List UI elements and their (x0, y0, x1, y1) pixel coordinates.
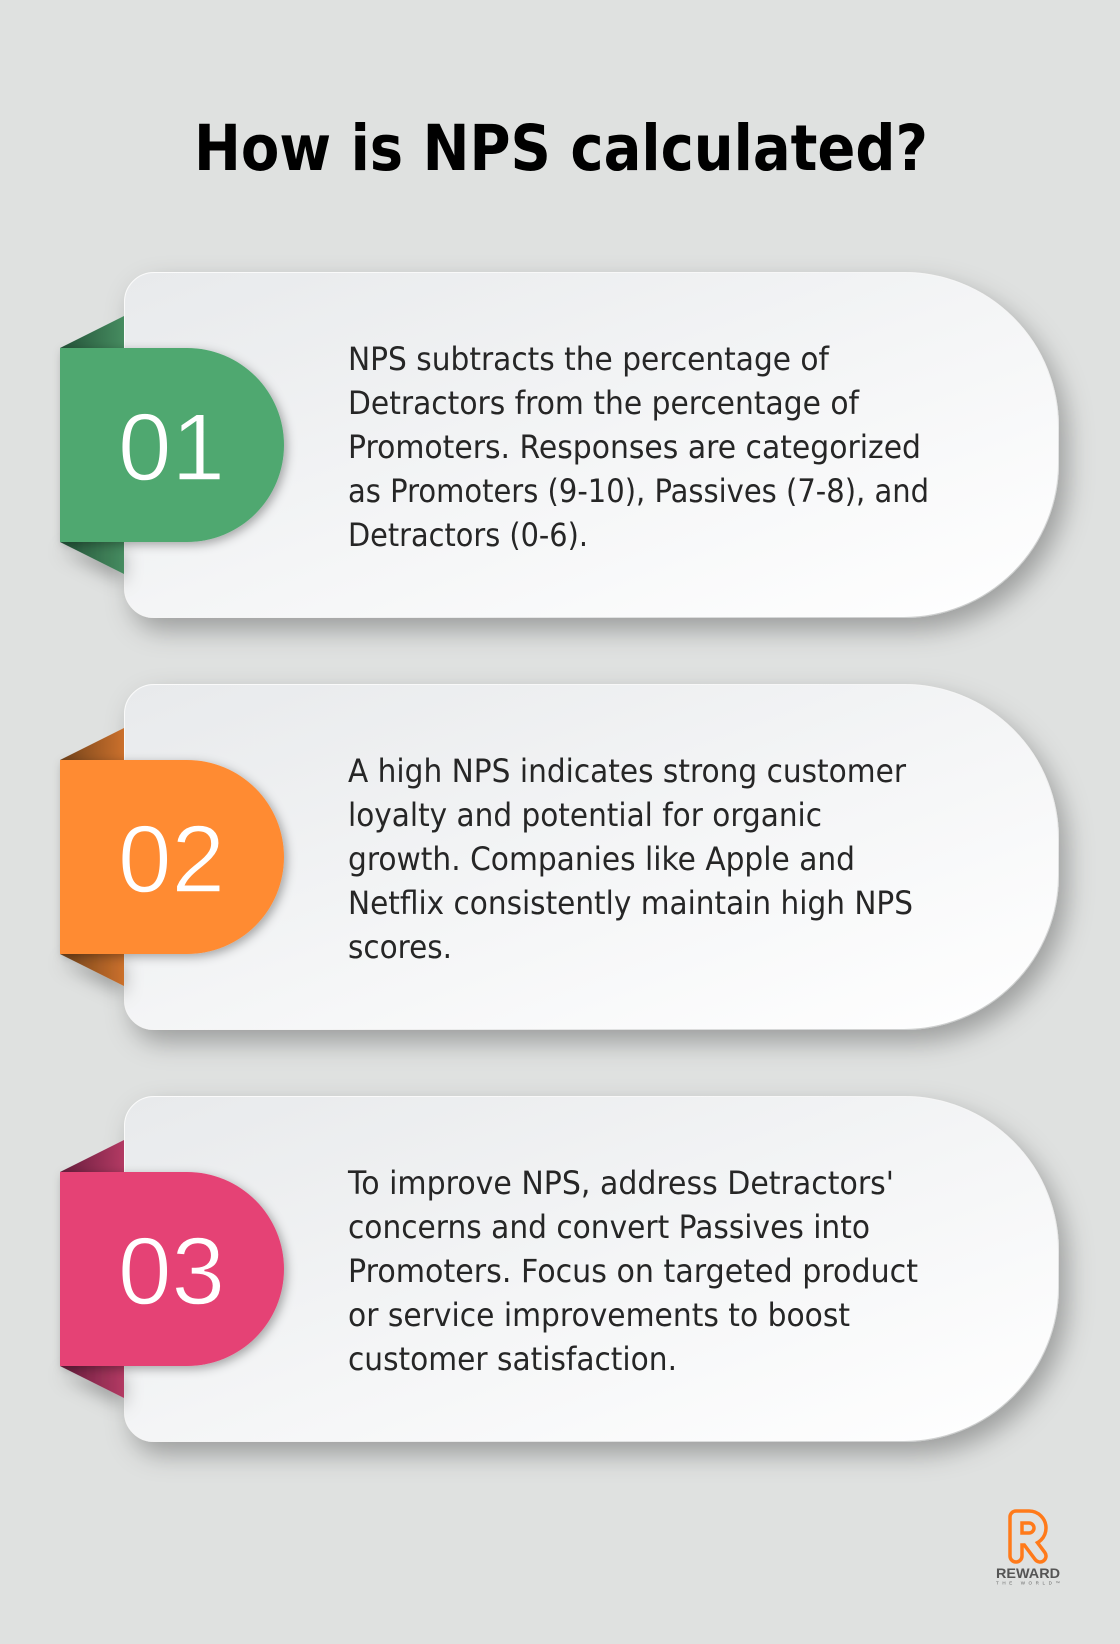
ribbon fold top 03 (60, 1140, 124, 1172)
text block 02: loyalty and potential for organic (348, 796, 822, 834)
text block 03: customer satisfaction. (348, 1340, 677, 1378)
text block 02 (348, 752, 913, 966)
text block 03: or service improvements to boost (348, 1296, 850, 1334)
icon: R mark (1016, 1517, 1040, 1556)
card 01 (124, 272, 1058, 618)
panel: step 01 (60, 272, 1058, 618)
text block 03: To improve NPS, address Detractors' (347, 1164, 894, 1202)
number 03: 03 (118, 1218, 225, 1325)
text block 01: as Promoters (9-10), Passives (7-8), and (348, 472, 929, 510)
text block 02: A high NPS indicates strong customer (348, 752, 907, 790)
number 01: 01 (118, 394, 225, 501)
ribbon fold bottom 03 (60, 1366, 124, 1398)
badge 02 (60, 760, 284, 954)
ribbon fold bottom 01 (60, 542, 124, 574)
text block 01: Promoters. Responses are categorized (348, 428, 921, 466)
card 02 (124, 684, 1058, 1030)
panel: step 02 (60, 684, 1058, 1030)
text block 03: Promoters. Focus on targeted product (348, 1252, 918, 1290)
text block 01: Detractors from the percentage of (348, 384, 860, 422)
panel: step 03 (60, 1096, 1058, 1442)
text block 02: scores. (348, 928, 452, 966)
text block 01 (348, 340, 929, 554)
badge 01 (60, 348, 284, 542)
text block 03: concerns and convert Passives into (348, 1208, 870, 1246)
text block 02: Netflix consistently maintain high NPS (348, 884, 913, 922)
wordmark: REWARD (996, 1565, 1060, 1581)
text block 01: Detractors (0-6). (348, 516, 588, 554)
ribbon fold top 02 (60, 728, 124, 760)
badge 03 (60, 1172, 284, 1366)
text block 01: NPS subtracts the percentage of (348, 340, 830, 378)
ribbon fold bottom 02 (60, 954, 124, 986)
card 03 (124, 1096, 1058, 1442)
tagline: THE WORLD™ (996, 1580, 1060, 1586)
title: How is NPS calculated? (194, 112, 928, 185)
number 02: 02 (118, 806, 225, 913)
text block 02: growth. Companies like Apple and (348, 840, 855, 878)
text block 03 (347, 1164, 918, 1378)
logo: Reward the World (996, 1517, 1060, 1586)
ribbon fold top 01 (60, 316, 124, 348)
